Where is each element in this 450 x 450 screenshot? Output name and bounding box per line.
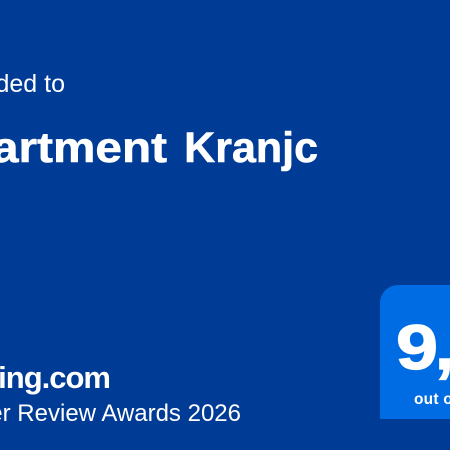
- score value: 9: [396, 312, 438, 383]
- property name heading: [0, 123, 318, 172]
- property name heading: Kranjc: [184, 124, 318, 172]
- score badge: [380, 285, 450, 419]
